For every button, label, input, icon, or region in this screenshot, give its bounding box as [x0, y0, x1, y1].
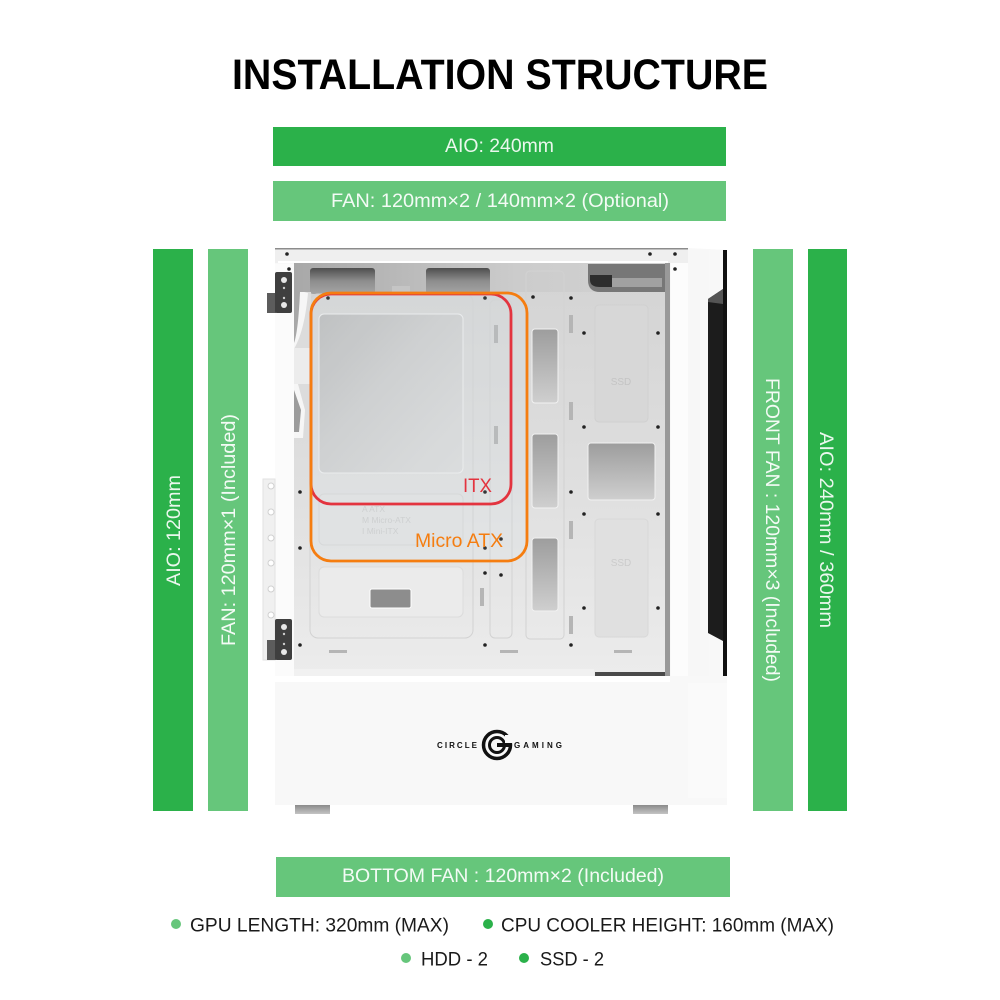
- left bracket: [263, 479, 275, 660]
- logo: Circle Gaming: GAMING: [514, 741, 562, 750]
- bar: left AIO 120mm: AIO: 120mm: [164, 475, 185, 586]
- motherboard tray: [294, 263, 670, 676]
- tray panel outlines: [310, 271, 564, 639]
- Micro ATX outline: [311, 293, 527, 561]
- spec: CPU cooler height: CPU COOLER HEIGHT: 160mm (MAX): [501, 914, 834, 936]
- PC case illustration: SSD: [611, 377, 631, 388]
- title: INSTALLATION STRUCTURE: [232, 51, 768, 99]
- feet: [295, 805, 330, 814]
- base shroud: [275, 676, 727, 805]
- bar: right AIO: [808, 249, 847, 811]
- front panel black edge: [723, 250, 727, 683]
- bar: top fan: FAN: 120mm×2 / 140mm×2 (Optional): [331, 191, 669, 212]
- lower panels: [319, 494, 463, 545]
- tray form factor text: [362, 504, 411, 536]
- small rectangular cutout: [370, 589, 411, 608]
- top vents: [310, 268, 375, 294]
- rear fan blades: [294, 292, 311, 440]
- bar: right AIO: AIO: 240mm / 360mm: [815, 432, 836, 628]
- tray form factor text: I Mini-ITX: [362, 526, 399, 536]
- spec: GPU length: GPU LENGTH: 320mm (MAX): [190, 914, 449, 936]
- top band: [294, 263, 665, 292]
- spec: SSD: SSD - 2: [540, 948, 604, 970]
- spec: HDD: HDD - 2: [421, 948, 488, 970]
- case body: [275, 248, 727, 805]
- bar: left AIO 120mm: [153, 249, 193, 811]
- tray form factor text: A ATX: [362, 504, 385, 514]
- bar: front fan: FRONT FAN : 120mm×3 (Included): [761, 378, 782, 682]
- bar: left fan: [208, 249, 248, 811]
- top frame: [275, 248, 688, 263]
- large cutout window: [319, 314, 463, 473]
- front white column: [688, 250, 709, 683]
- bar: bottom fan: [276, 857, 730, 897]
- cable cutouts: [532, 329, 558, 403]
- SSD mount panels: [595, 305, 648, 422]
- PSU opening: [588, 264, 665, 292]
- ITX outline: [311, 294, 511, 504]
- bar: top fan: [273, 181, 726, 221]
- Micro ATX outline: Micro ATX: [415, 530, 503, 552]
- bottom hinge: [267, 619, 292, 660]
- PC case illustration: [263, 248, 727, 814]
- bottom fringe: [294, 669, 594, 676]
- bar: left fan: FAN: 120mm×1 (Included): [219, 414, 240, 646]
- bar: top AIO 240mm: [273, 127, 726, 166]
- PC case illustration: SSD: [611, 558, 631, 569]
- bar: top AIO 240mm: AIO: 240mm: [445, 136, 554, 157]
- bar: front fan: [753, 249, 793, 811]
- tray form factor text: M Micro-ATX: [362, 515, 411, 525]
- top hinge: [267, 272, 292, 313]
- ITX outline: ITX: [463, 475, 492, 497]
- standoff screws: [285, 252, 677, 647]
- logo: Circle Gaming: [437, 732, 562, 758]
- logo: Circle Gaming: CIRCLE: [437, 741, 478, 750]
- bar: bottom fan: BOTTOM FAN : 120mm×2 (Included): [342, 866, 664, 887]
- mounting slots: [329, 315, 632, 653]
